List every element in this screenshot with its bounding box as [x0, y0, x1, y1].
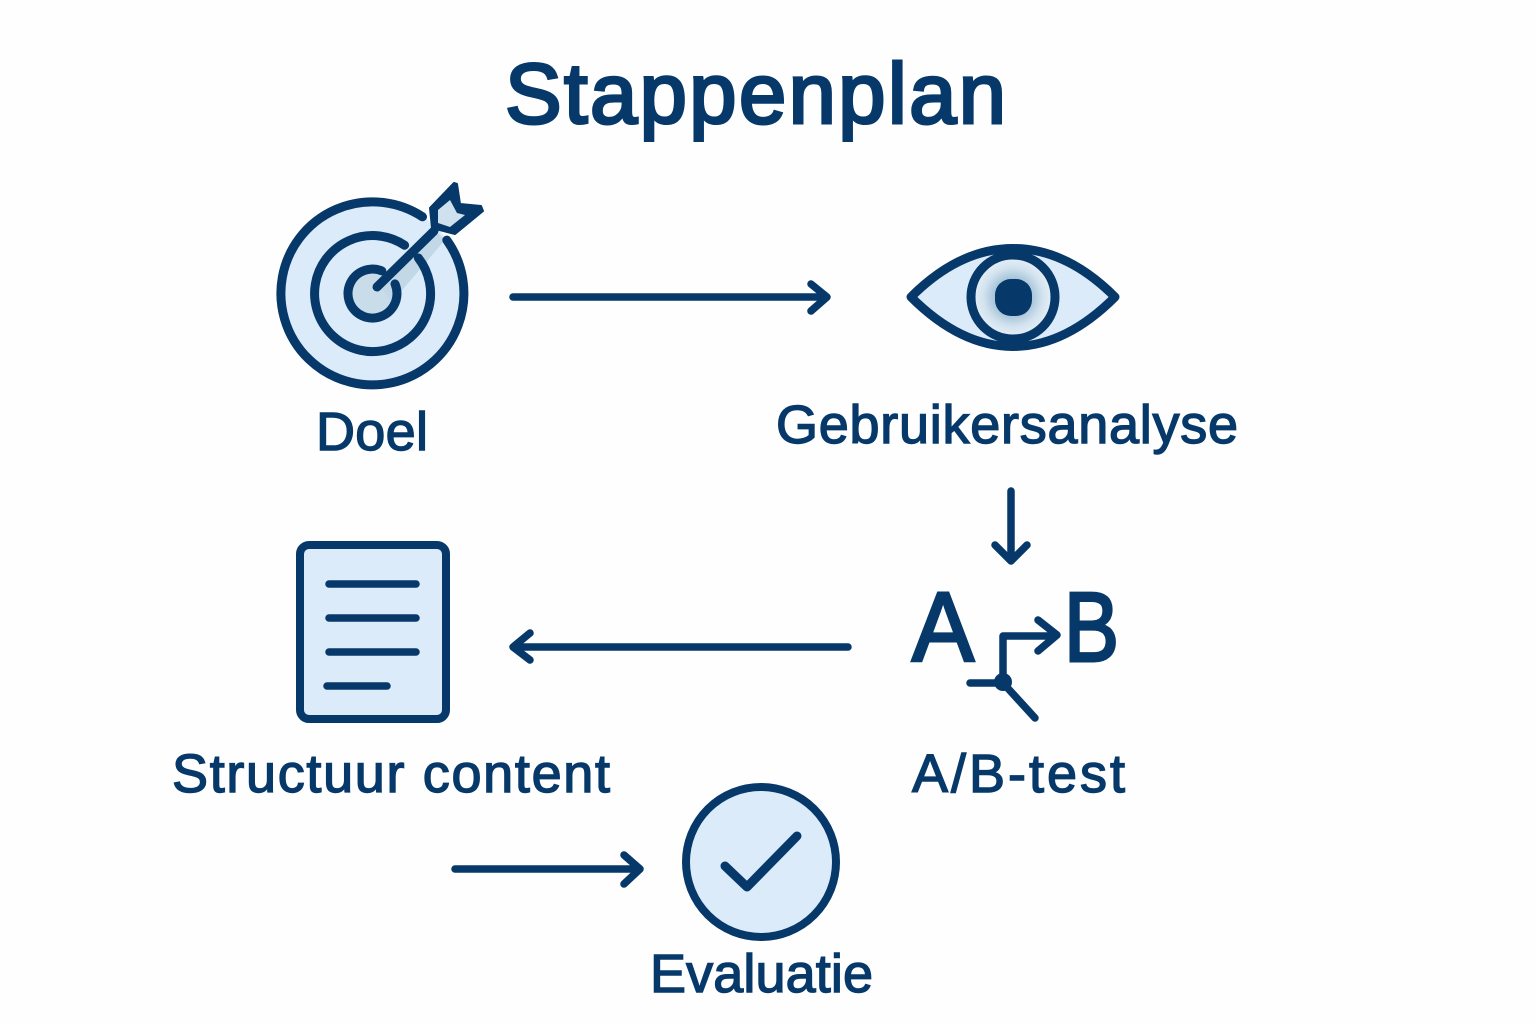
- label: Doel: Doel: [316, 402, 428, 462]
- arrow: doel to gebruikersanalyse: [513, 284, 827, 311]
- label: Structuur content: Structuur content: [172, 744, 610, 804]
- icon: target with arrow: [280, 183, 483, 386]
- icon: document: [300, 545, 446, 719]
- icon: eye: [911, 248, 1115, 346]
- label: Evaluatie: Evaluatie: [650, 944, 873, 1004]
- label: Gebruikersanalyse: Gebruikersanalyse: [776, 395, 1238, 455]
- label: A/B-test: A/B-test: [912, 744, 1125, 804]
- icon: check circle: [686, 787, 836, 937]
- icon: A/B split: B: [1064, 572, 1119, 682]
- arrow: gebruikersanalyse to A/B-test: [995, 491, 1027, 561]
- icon: A/B split: [912, 572, 1119, 718]
- title: Stappenplan: [505, 47, 1006, 142]
- icon: A/B split: A: [912, 572, 975, 682]
- arrow: structuur content to evaluatie: [455, 855, 640, 884]
- arrow: A/B-test to structuur content: [513, 633, 848, 660]
